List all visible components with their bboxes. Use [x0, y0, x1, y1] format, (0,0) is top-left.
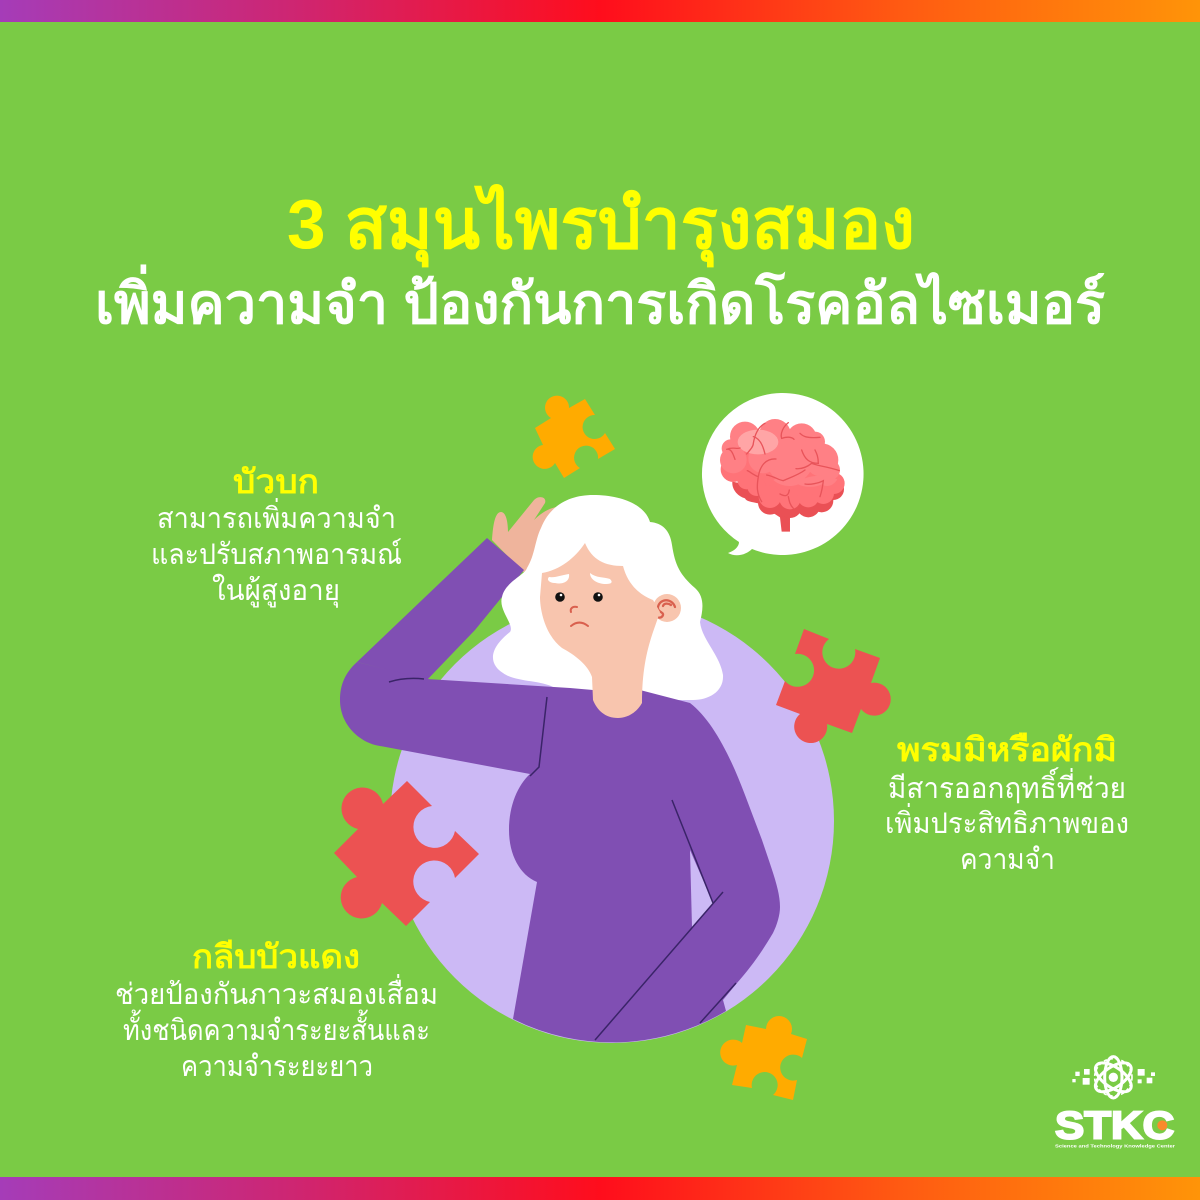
ear: [653, 594, 681, 622]
hair: [493, 495, 723, 700]
text block: bua bok: บัวบก: [233, 463, 319, 500]
brain: [720, 419, 845, 532]
text block: lotus petals: ความจำระยะยาว: [181, 1051, 373, 1083]
hand: [492, 497, 562, 572]
text block: brahmi: [885, 731, 1129, 876]
face and neck: [540, 543, 660, 718]
speech bubble: [702, 393, 864, 555]
puzzle piece: red left: [334, 781, 479, 926]
logo orange dot: [1157, 1120, 1167, 1130]
clothing lines: [389, 678, 736, 1040]
text block: bua bok: [151, 463, 402, 608]
logo tagline: Science and Technology Knowledge Center: [1055, 1143, 1175, 1149]
logo wordmark: STKC: [1055, 1104, 1174, 1147]
lavender gap between arm and torso: [690, 850, 713, 927]
text block: brahmi: มีสารออกฤทธิ์ที่ช่วย: [888, 767, 1126, 805]
eyes: [555, 592, 565, 602]
torso and arm: [340, 662, 780, 1042]
mouth: [571, 623, 588, 626]
text block: brahmi: ความจำ: [960, 844, 1055, 876]
top gradient bar: [0, 0, 1200, 22]
text block: lotus petals: [115, 938, 438, 1083]
puzzle piece: orange top: [533, 396, 615, 478]
text block: lotus petals: ช่วยป้องกันภาวะสมองเสื่อม: [115, 974, 438, 1011]
nose: [571, 607, 577, 612]
logo atom icon: [1091, 1057, 1136, 1098]
puzzle piece: red right: [776, 629, 891, 743]
text block: bua bok: และปรับสภาพอารมณ์: [151, 538, 402, 571]
lavender circle: [390, 599, 834, 1043]
text block: brahmi: พรมมิหรือผักมิ: [897, 731, 1117, 768]
text block: lotus petals: กลีบบัวแดง: [192, 938, 360, 975]
right eyebrow: [590, 573, 612, 584]
bottom gradient bar: [0, 1177, 1200, 1200]
text block: brahmi: เพิ่มประสิทธิภาพของ: [885, 803, 1129, 840]
puzzle piece: orange bottom: [720, 1016, 807, 1100]
raised sleeve: [357, 538, 524, 680]
text block: bua bok: ในผู้สูงอายุ: [212, 573, 340, 608]
title: [95, 183, 1105, 335]
title: 3 สมุนไพรบำรุงสมอง: [287, 183, 915, 268]
text block: bua bok: สามารถเพิ่มความจำ: [157, 498, 396, 535]
left eyebrow: [548, 574, 569, 583]
logo: STKC: [1055, 1057, 1175, 1149]
text block: lotus petals: ทั้งชนิดความจำระยะสั้นและ: [123, 1009, 430, 1047]
title: เพิ่มความจำ ป้องกันการเกิดโรคอัลไซเมอร์: [95, 264, 1105, 335]
ear detail: [657, 600, 675, 618]
logo dots: [1072, 1069, 1155, 1085]
speech bubble with brain: [702, 393, 864, 555]
illustration: worried elderly woman: [340, 495, 780, 1042]
